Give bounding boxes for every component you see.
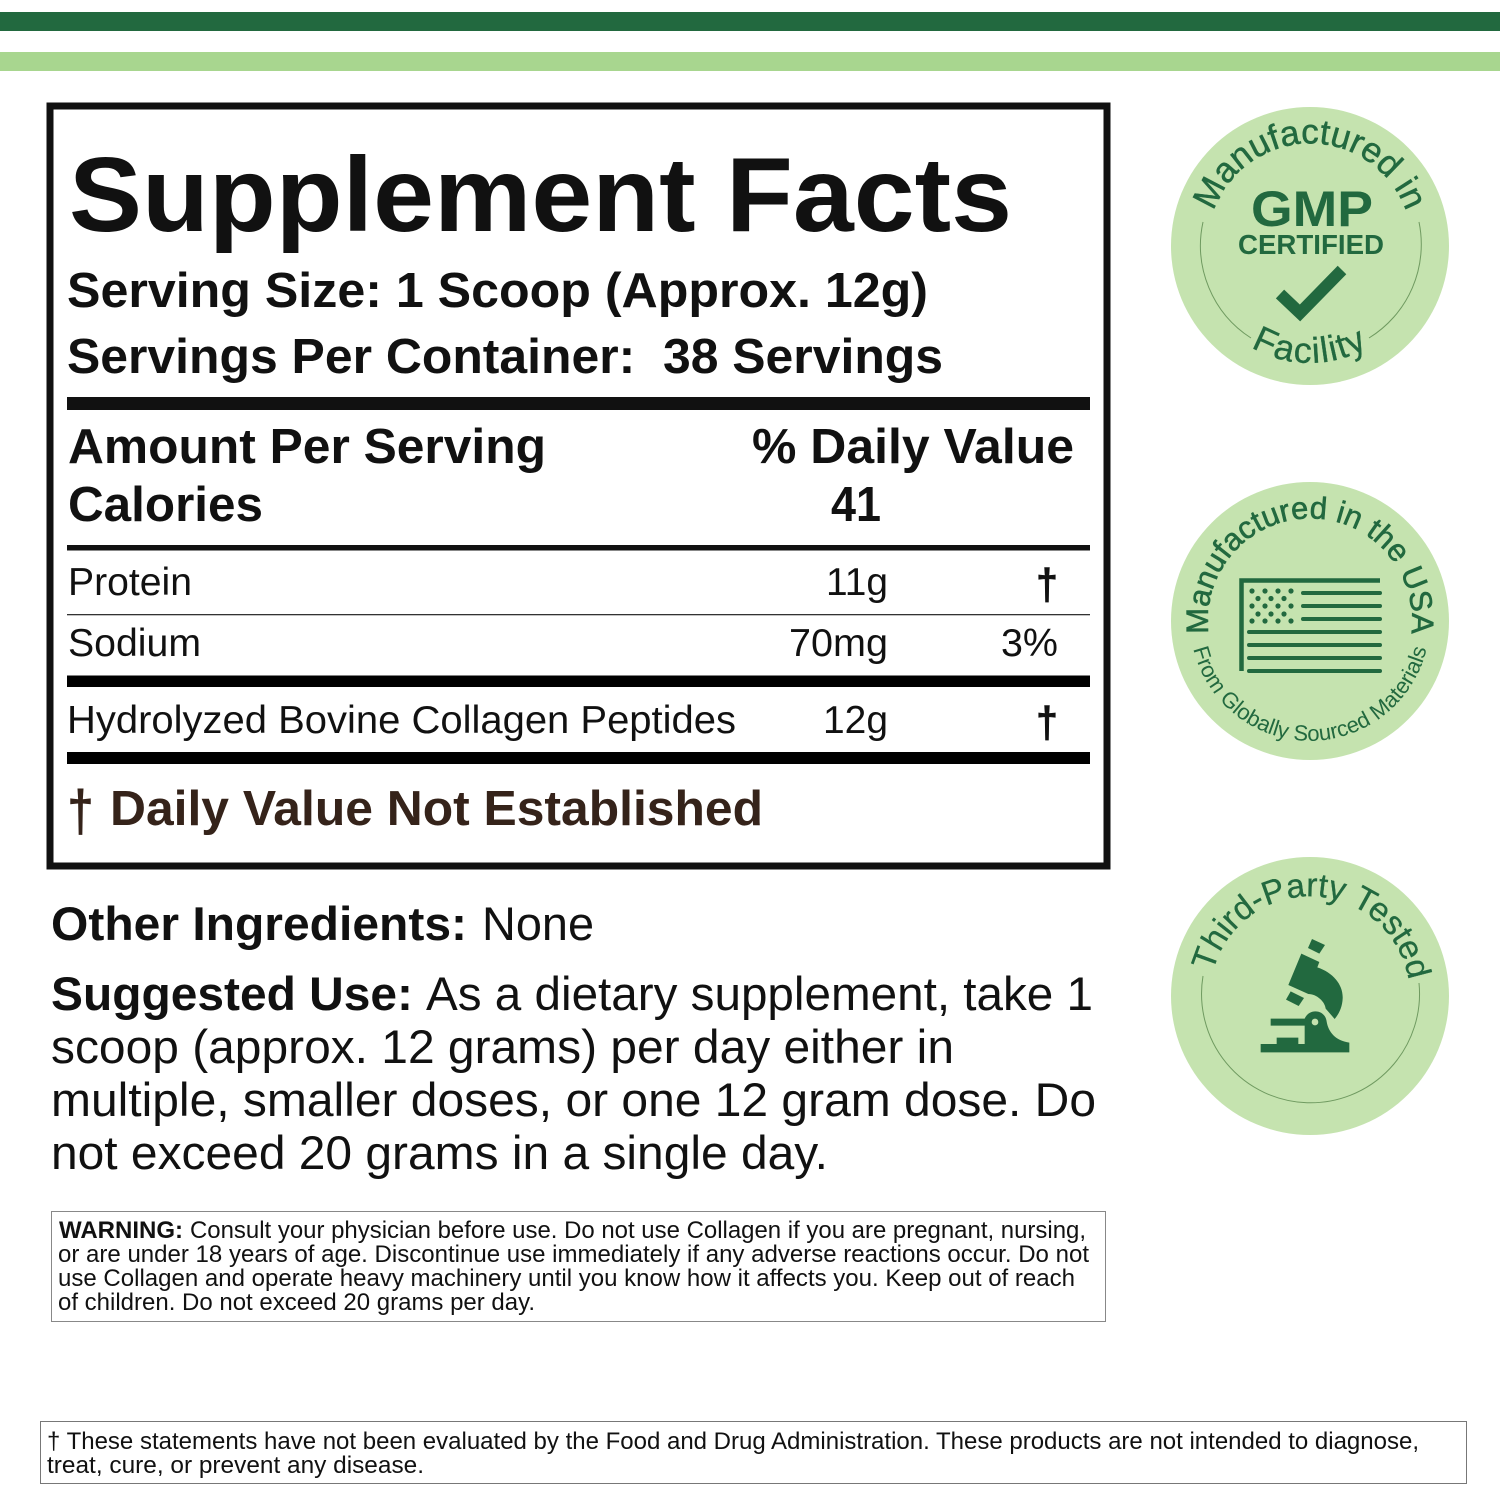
arc text: manufactured in the USA: Manufactured in the USA: [1186, 496, 1434, 634]
badge: third-party tested: [1171, 857, 1449, 1135]
calories value: 41: [831, 478, 881, 532]
row: collagen peptides: [67, 698, 1058, 747]
footnote: daily value not established: †: [67, 779, 94, 844]
calories label: Calories: [68, 478, 263, 532]
warning box: use Collagen and operate heavy machinery until you know how it affects you. Keep out of reach: [58, 1265, 1075, 1292]
icon: american flag: [1242, 580, 1380, 671]
warning box: or are under 18 years of age. Discontinue use immediately if any adverse reactions occur. Do not: [58, 1241, 1089, 1268]
suggested use: multiple, smaller doses, or one 12 gram dose. Do: [51, 1073, 1096, 1126]
row: sodium: 3%: [1001, 622, 1058, 665]
badge: manufactured in the USA: [1171, 482, 1449, 760]
suggested use: [51, 967, 1096, 1179]
arc text: facility: Facility: [1253, 326, 1362, 364]
FDA disclaimer box: [40, 1422, 1466, 1484]
title: Supplement Facts: [69, 136, 1012, 254]
arc text: third-party tested: Third-Party Tested: [1190, 875, 1432, 978]
table header: daily value: % Daily Value: [752, 420, 1074, 474]
panel: supplement facts label: [50, 106, 1107, 866]
row: protein: Protein: [68, 561, 192, 604]
table header: amount per serving: Amount Per Serving: [68, 420, 546, 474]
row: sodium: 70mg: [789, 622, 888, 665]
row: collagen peptides: 12g: [823, 699, 888, 742]
other ingredients: None: [482, 897, 594, 950]
certified: CERTIFIED: [1238, 229, 1384, 260]
badge: GMP certified: [1171, 107, 1449, 385]
suggested use: not exceed 20 grams in a single day.: [51, 1126, 828, 1179]
row: protein: †: [1036, 560, 1058, 609]
GMP: GMP: [1251, 181, 1373, 237]
row: sodium: Sodium: [68, 622, 201, 665]
warning box: of children. Do not exceed 20 grams per day.: [58, 1289, 535, 1316]
suggested use: Suggested Use:: [51, 967, 413, 1020]
arc text: manufactured in: Manufactured in: [1192, 121, 1422, 210]
suggested use: As a dietary supplement, take 1: [426, 967, 1093, 1020]
servings per container: Servings Per Container: 38 Servings: [67, 330, 943, 384]
row: collagen peptides: †: [1036, 698, 1058, 747]
other ingredients: Other Ingredients:: [51, 897, 467, 950]
row: protein: [68, 560, 1058, 609]
row: protein: 11g: [826, 561, 888, 604]
serving size: Serving Size: 1 Scoop (Approx. 12g): [67, 264, 928, 318]
row: collagen peptides: Hydrolyzed Bovine Collagen Peptides: [67, 699, 736, 742]
FDA disclaimer box: † These statements have not been evaluated by the Food and Drug Administration. These products are not intended to diagnose,: [47, 1428, 1419, 1455]
warning box: Consult your physician before use. Do not use Collagen if you are pregnant, nursing,: [190, 1217, 1086, 1244]
suggested use: scoop (approx. 12 grams) per day either in: [51, 1020, 954, 1073]
icon: microscope: [1261, 939, 1349, 1052]
row: sodium: [68, 622, 1058, 665]
top dark green band: [0, 12, 1500, 31]
FDA disclaimer box: treat, cure, or prevent any disease.: [47, 1452, 424, 1479]
footnote: daily value not established: Daily Value Not Established: [110, 782, 763, 836]
warning box: WARNING:: [59, 1217, 183, 1244]
icon: check mark: [1280, 270, 1342, 313]
top light green band: [0, 52, 1500, 71]
warning box: [52, 1212, 1106, 1322]
arc text: from globally sourced materials: From Globally Sourced Materials: [1194, 646, 1426, 742]
